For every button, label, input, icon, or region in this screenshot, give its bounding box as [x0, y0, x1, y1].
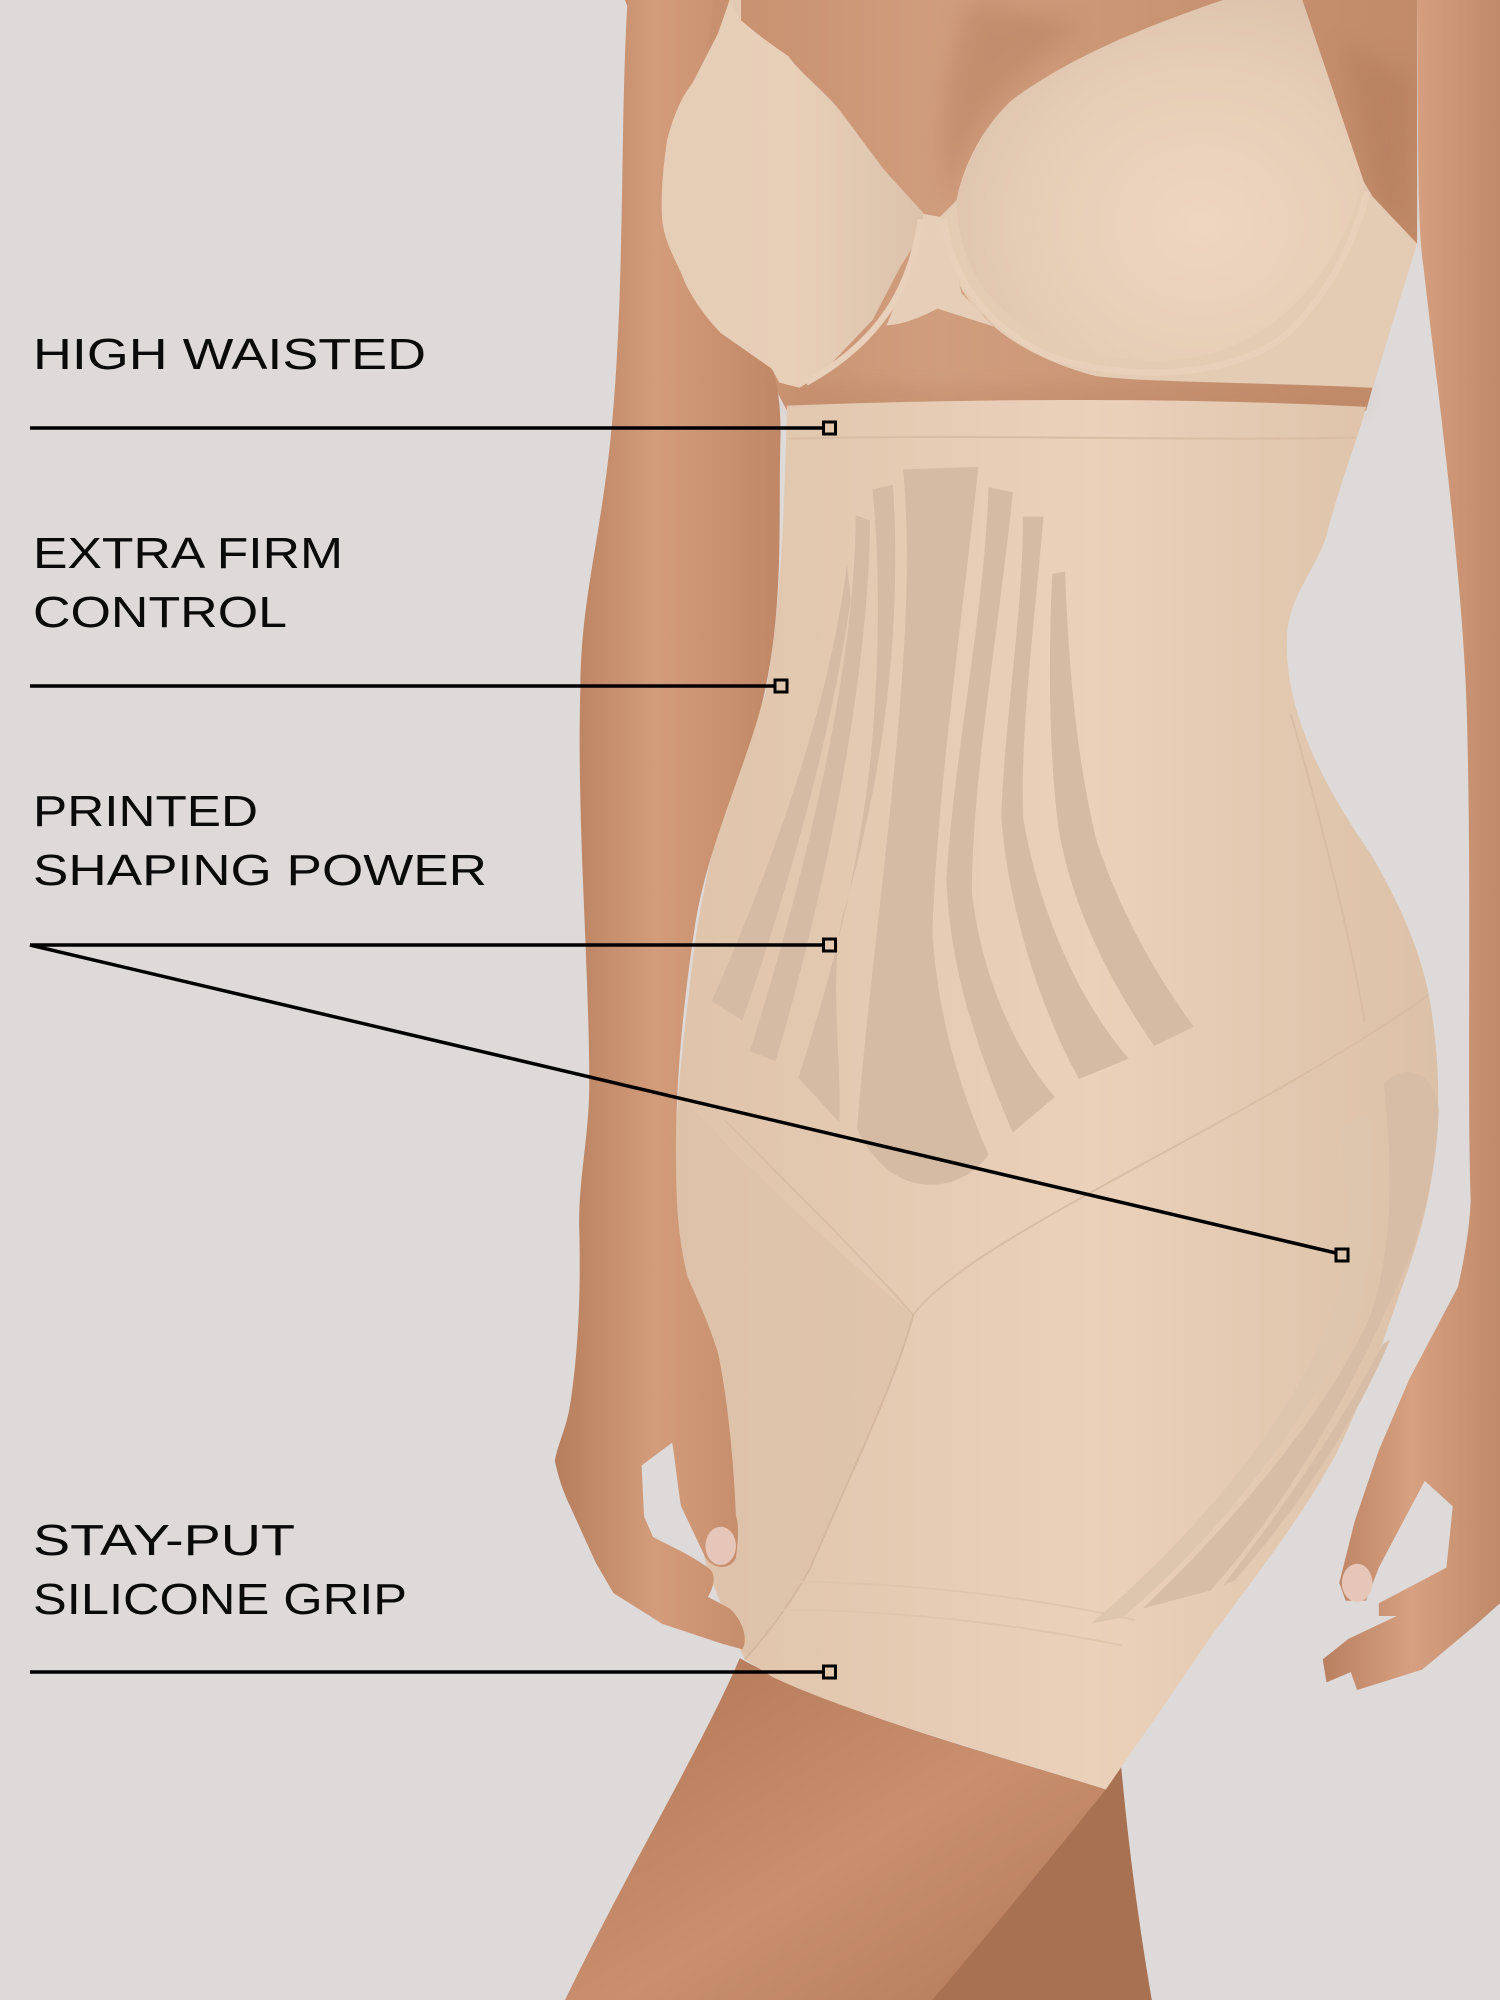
- marker: [775, 680, 787, 692]
- hip thin strip: [1223, 1339, 1390, 1585]
- label: extra firm control: EXTRA FIRM: [33, 529, 343, 578]
- leader line: [30, 1670, 823, 1674]
- label: printed shaping power: SHAPING POWER: [33, 846, 487, 895]
- inner leg shading: [675, 1097, 913, 1659]
- marker: waist panel: [824, 939, 836, 951]
- label: stay-put silicone grip: STAY-PUT: [33, 1516, 295, 1565]
- leader lines: [30, 945, 1336, 1253]
- upper torso skin: [625, 0, 1417, 411]
- marker: [824, 1666, 836, 1678]
- back leg: [925, 1767, 1152, 2000]
- skin shadows: [791, 0, 1413, 408]
- callout: high waisted: [30, 330, 836, 434]
- gore: [886, 213, 994, 327]
- callout: printed shaping power: [30, 787, 1348, 1261]
- garment seams: [724, 437, 1429, 1659]
- printed shaping panels: front: [712, 467, 1194, 1185]
- callout: extra firm control: [30, 529, 787, 692]
- underwire edges: [806, 191, 1367, 383]
- hip outer strip: [1091, 1112, 1374, 1624]
- model figure wearing high-waisted shaper: [555, 0, 1500, 2000]
- label: printed shaping power: PRINTED: [33, 787, 258, 836]
- leader line: [30, 684, 775, 688]
- front thigh: [565, 1658, 1106, 2000]
- right cup and band: [940, 0, 1417, 388]
- bra: [662, 0, 1417, 388]
- leader line: [30, 426, 823, 430]
- printed shaping panels: hip: [1091, 1072, 1439, 1624]
- label: high waisted: HIGH WAISTED: [33, 330, 426, 379]
- marker: [824, 422, 836, 434]
- marker: hip panel: [1336, 1249, 1348, 1261]
- right arm and hand: [1323, 0, 1500, 1690]
- shaper garment: [674, 400, 1439, 1790]
- left arm and hand: [555, 0, 781, 1649]
- bra left strap: [718, 0, 741, 38]
- fingernail: left hand: [705, 1527, 736, 1565]
- callout: stay-put silicone grip: [30, 1516, 836, 1678]
- hip main strip: [1143, 1072, 1439, 1608]
- garment body: [674, 400, 1438, 1790]
- label: extra firm control: CONTROL: [33, 588, 287, 637]
- right cup bowl: [957, 0, 1364, 361]
- label: stay-put silicone grip: SILICONE GRIP: [33, 1575, 407, 1624]
- fingernail: right hand: [1342, 1564, 1372, 1602]
- left cup: [662, 0, 923, 388]
